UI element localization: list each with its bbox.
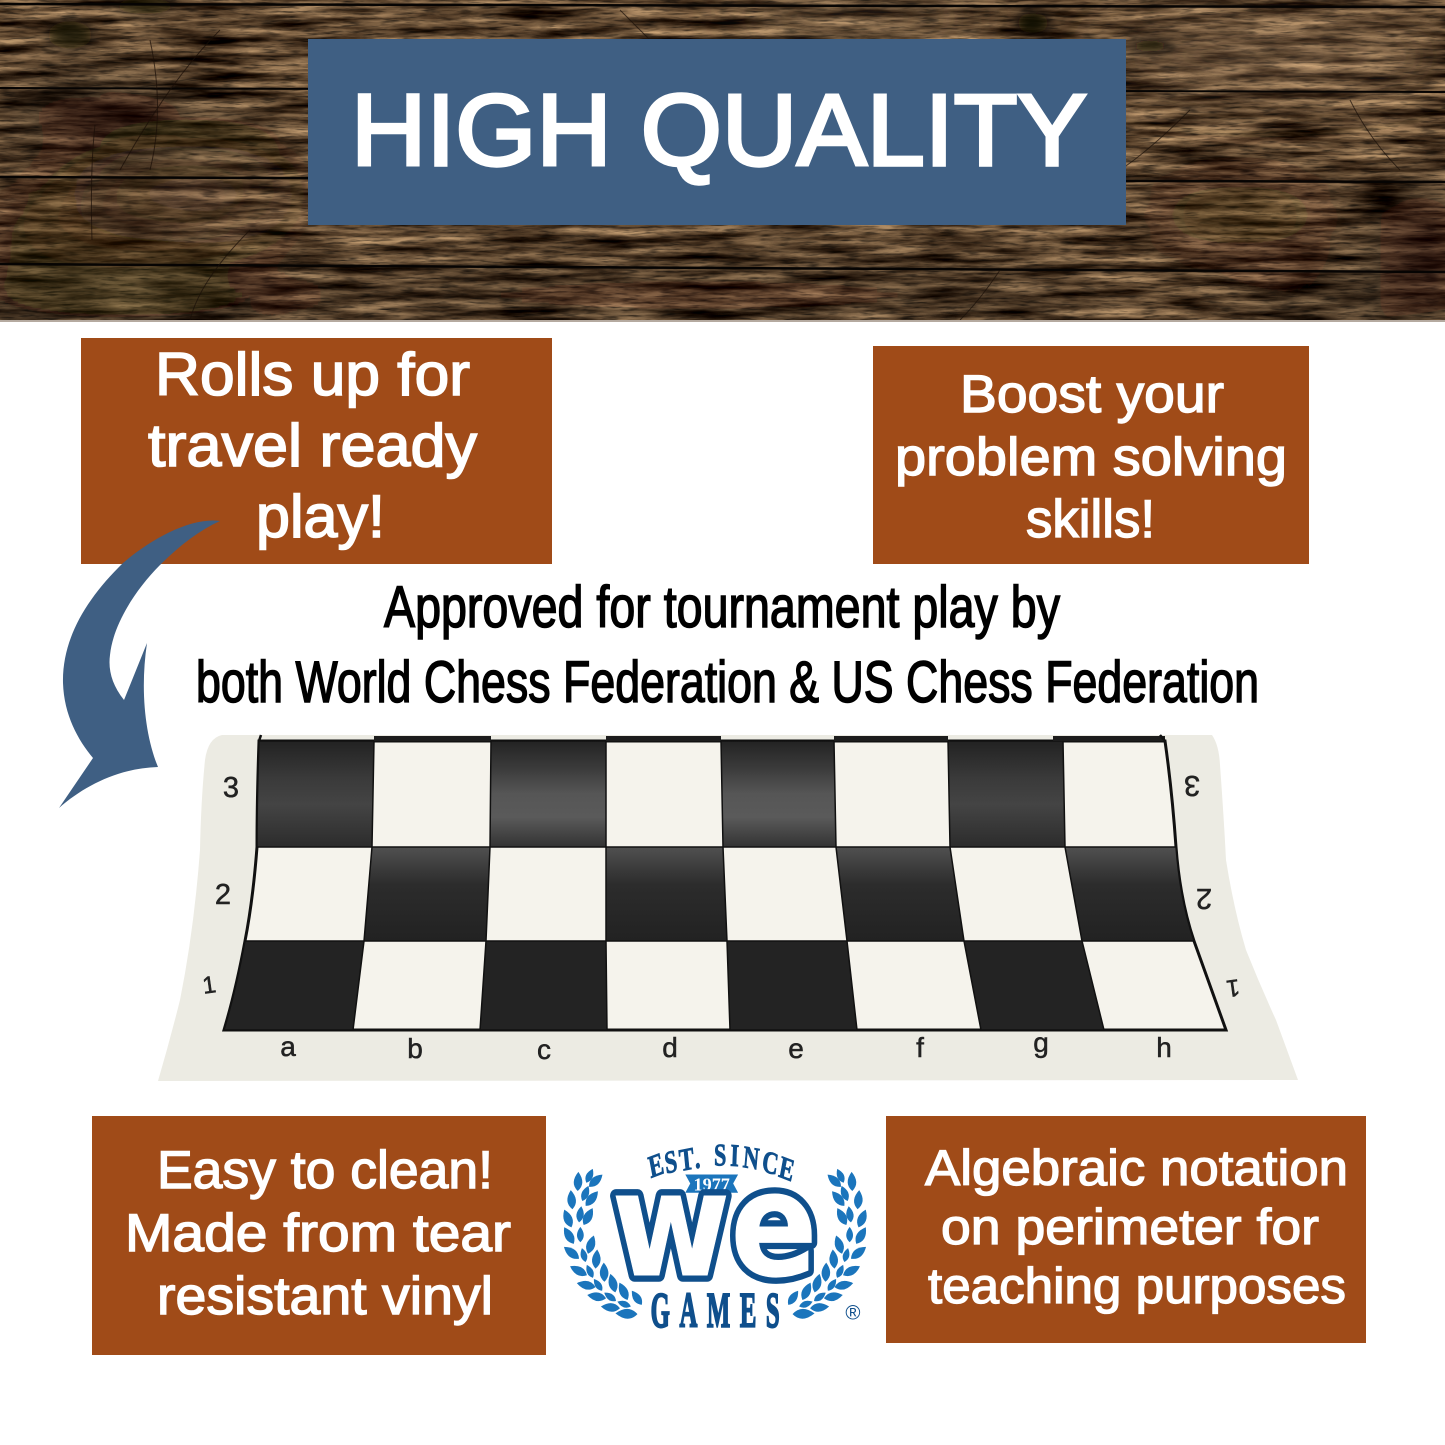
est. since: EST.SINCE [646,1138,797,1188]
title banner: HIGH QUALITY [351,75,1087,187]
file labels [280,1027,1172,1065]
callout: rolls up: Rolls up for [155,341,470,408]
file labels: e [788,1033,804,1064]
file labels: b [407,1033,423,1064]
callout: rolls up: travel ready [148,412,477,479]
callout: problem solving: skills! [1026,490,1155,549]
rank labels: 1 [1225,973,1242,1002]
top row strip [374,736,1165,741]
callout: problem solving: problem solving [895,428,1287,487]
file labels: a [280,1031,296,1062]
rank labels [201,769,1242,1002]
file labels: d [662,1032,678,1063]
games: GAMES [651,1283,789,1338]
approval statement: Approved for tournament play by [384,575,1060,640]
callout: rolls up: play! [256,483,385,550]
rank labels: 2 [215,879,231,911]
title banner [308,39,1126,225]
file labels: g [1033,1027,1049,1058]
callout: easy to clean: resistant vinyl [157,1267,493,1326]
callout: easy to clean: Made from tear [125,1204,511,1263]
rank labels: 1 [201,971,218,1000]
approval statement [196,575,1259,715]
rank labels: 3 [1184,769,1200,801]
callout: algebraic notation: teaching purposes [928,1258,1346,1314]
file labels: h [1156,1032,1172,1063]
curved arrow [59,521,220,808]
vinyl sheet [158,735,1298,1081]
file labels: c [537,1034,551,1065]
callout: easy to clean [92,1116,546,1355]
callout: algebraic notation: Algebraic notation [925,1140,1348,1196]
callout: problem solving [873,346,1309,564]
badge: 1977: 1977 [694,1175,730,1195]
icon: laurel wreath [560,1167,870,1319]
callout: easy to clean: Easy to clean! [157,1141,493,1200]
wordmark: we: we [611,1141,818,1310]
wood plank banner [0,0,1445,322]
callout: algebraic notation [886,1116,1366,1343]
rank labels: 2 [1196,882,1212,914]
registered mark: ® [845,1301,860,1324]
callout: rolls up [81,338,552,564]
wordmark: we: we [611,1141,818,1310]
board squares [224,735,1226,1030]
callout: problem solving: Boost your [960,365,1224,424]
logo: WE Games [560,1138,870,1338]
chess board [158,735,1298,1081]
file labels: f [916,1032,924,1063]
badge: 1977 [685,1175,738,1195]
callout: algebraic notation: on perimeter for [941,1199,1319,1255]
rank labels: 3 [223,772,239,804]
